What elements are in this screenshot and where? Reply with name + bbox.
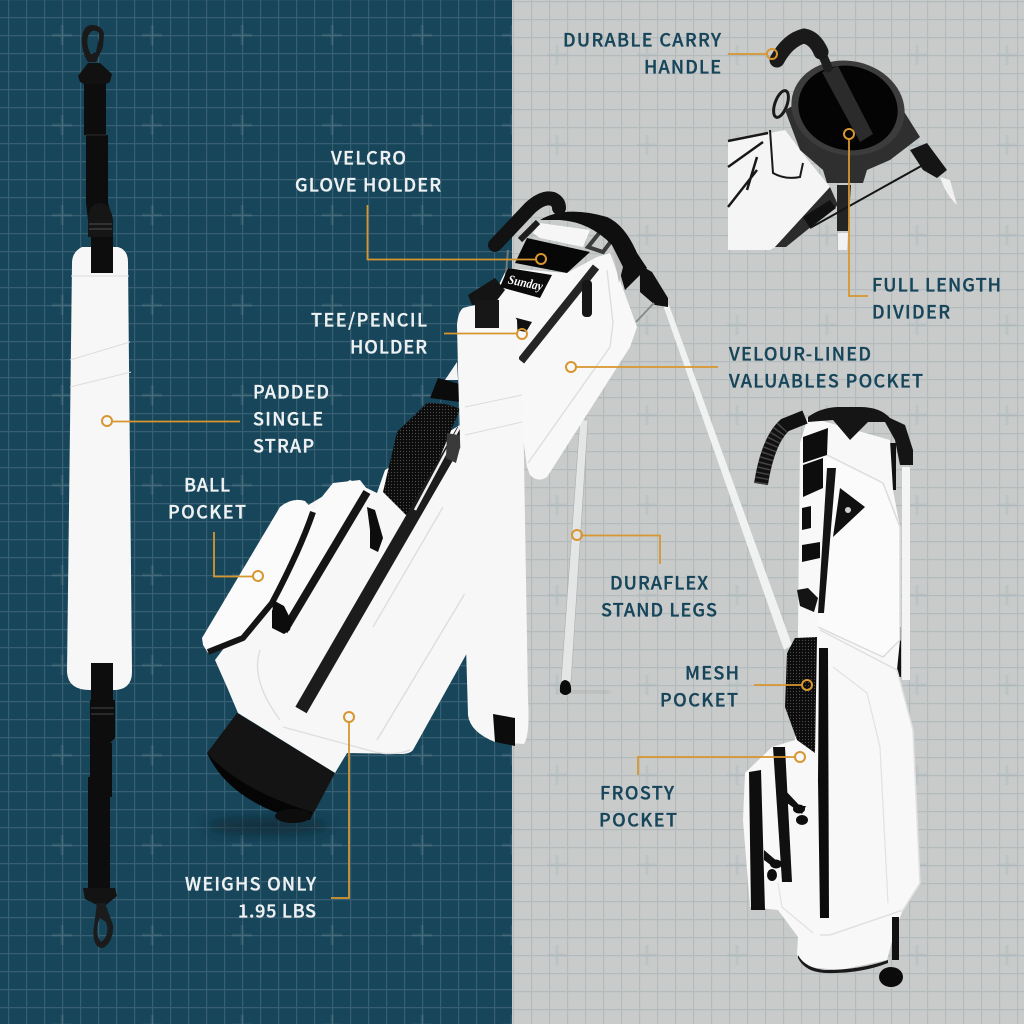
callout: weighs only 1.95 lbs: WEIGHS ONLY — [185, 870, 316, 896]
callout: padded single strap: PADDED — [253, 378, 329, 404]
panel: dark blueprint background — [0, 0, 512, 1024]
callout: durable carry handle — [563, 26, 777, 80]
callout: durable carry handle: HANDLE — [644, 54, 721, 80]
callout: full length divider — [844, 129, 1001, 324]
callout: velour-lined valuables pocket: VALUABLES POCKET — [728, 368, 923, 394]
product: top-down inset of bag opening — [728, 36, 957, 250]
callout: ball pocket: BALL — [184, 472, 230, 498]
callout: padded single strap — [102, 378, 329, 458]
callout: duraflex stand legs: DURAFLEX — [610, 570, 708, 596]
callout: full length divider: DIVIDER — [872, 298, 950, 324]
callout: tee/pencil holder — [311, 306, 527, 360]
panel: light blueprint background — [512, 0, 1024, 1024]
callout: weighs only 1.95 lbs — [185, 712, 354, 924]
callout: duraflex stand legs — [572, 530, 717, 622]
callout: velcro glove holder: VELCRO — [330, 144, 406, 170]
callout: frosty pocket: FROSTY — [600, 780, 674, 806]
callout: frosty pocket — [599, 752, 805, 832]
product: detached padded strap — [67, 25, 132, 948]
callout: full length divider: FULL LENGTH — [872, 272, 1001, 298]
callout: mesh pocket: POCKET — [660, 686, 738, 712]
callout: weighs only 1.95 lbs: 1.95 LBS — [238, 898, 316, 924]
product: main bag side view — [202, 198, 792, 834]
callout: padded single strap: STRAP — [253, 432, 314, 458]
callout: tee/pencil holder: HOLDER — [350, 334, 427, 360]
callout: frosty pocket: POCKET — [599, 806, 677, 832]
logo: Sunday tag — [500, 268, 552, 298]
callout: velour-lined valuables pocket: VELOUR-LINED — [728, 340, 871, 366]
callout: padded single strap: SINGLE — [253, 406, 323, 432]
callout: duraflex stand legs: STAND LEGS — [601, 596, 717, 622]
callout: tee/pencil holder: TEE/PENCIL — [311, 306, 427, 332]
callout: mesh pocket: MESH — [685, 660, 739, 686]
callout: velour-lined valuables pocket — [566, 340, 923, 394]
callout: mesh pocket — [660, 660, 812, 712]
callout: velcro glove holder — [295, 144, 546, 264]
callout: ball pocket — [168, 472, 263, 581]
logo: Sunday tag: Sunday — [507, 272, 544, 294]
product: bag front view — [743, 407, 920, 987]
callout: velcro glove holder: GLOVE HOLDER — [295, 172, 441, 198]
callout: durable carry handle: DURABLE CARRY — [563, 26, 721, 52]
callout: ball pocket: POCKET — [168, 498, 246, 524]
